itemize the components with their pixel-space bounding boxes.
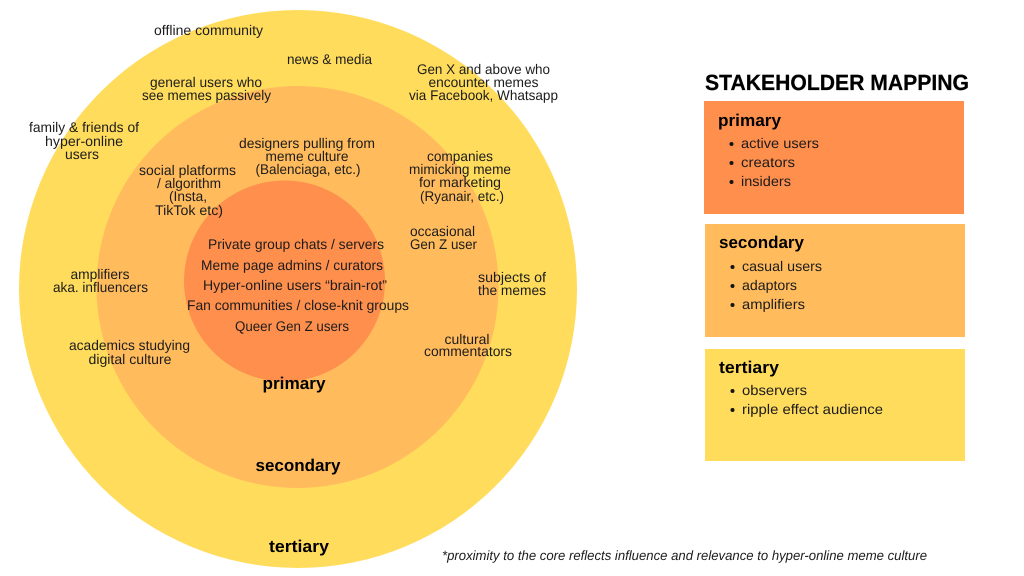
label: occasional Gen Z user: Gen Z user [410,236,477,252]
label: subjects of the memes: the memes [478,282,546,298]
label: general users: general users who [150,74,262,90]
label: academics: digital culture [88,351,172,367]
label: social platforms: (Insta, [169,188,207,204]
label: occasional Gen Z user [410,223,477,252]
secondary label: secondary [256,456,341,475]
label: cultural commentators: cultural [444,331,490,347]
label: offline community: offline community [154,22,263,38]
panel: secondary [705,224,965,337]
tertiary label: tertiary [269,537,330,556]
panel: tertiary: observers [742,382,807,398]
label: amplifiers: amplifiers [70,266,130,282]
label: general users: see memes passively [142,87,271,103]
label: family and friends: family & friends of [29,119,139,135]
panel: secondary: casual users [742,258,822,274]
label: social platforms [139,162,236,218]
label: designers: meme culture [266,148,349,164]
label: cultural commentators: commentators [424,343,512,359]
label: amplifiers: aka. influencers [53,279,148,295]
label: Gen X and above: encounter memes [428,74,538,90]
primary stakeholders list: Fan communities / close-knit groups [187,297,409,313]
panel: primary [704,101,964,214]
label: companies: (Ryanair, etc.) [420,188,504,204]
label: companies: for marketing [419,174,501,190]
primary stakeholders list: Hyper-online users “brain-rot” [203,277,387,293]
primary stakeholders list: Queer Gen Z users [235,318,349,334]
panel: primary: active users [741,135,819,151]
label: general users [142,74,271,103]
middle circle: secondary [96,86,498,488]
label: social platforms: / algorithm [157,175,221,191]
label: designers [239,135,375,177]
label: Gen X and above: Gen X and above who [417,61,550,77]
label: Gen X and above [409,61,558,103]
label: occasional Gen Z user: occasional [410,223,475,239]
panel: secondary: amplifiers [742,296,805,312]
label: Gen X and above: via Facebook, Whatsapp [409,87,558,103]
label: designers: (Balenciaga, etc.) [256,161,360,177]
primary stakeholders list: Private group chats / servers [208,236,384,252]
label: designers: designers pulling from [239,135,375,151]
label: social platforms: social platforms [139,162,236,178]
label: subjects of the memes: subjects of [478,269,546,285]
panel: secondary: secondary [719,233,805,252]
label: academics [69,337,190,367]
label: news and media: news & media [287,51,372,67]
label: academics: academics studying [69,337,190,353]
label: companies: mimicking meme [409,161,511,177]
label: social platforms: TikTok etc) [155,202,223,218]
title: STAKEHOLDER MAPPING [705,70,969,95]
panel: secondary: adaptors [742,277,797,293]
primary stakeholders list [187,236,409,334]
primary label: primary [262,374,326,393]
panel: tertiary: tertiary [719,358,780,377]
footnote: *proximity to the core reflects influence and relevance to hyper-online meme culture [442,548,927,563]
panel: tertiary [705,349,965,461]
panel: primary: creators [741,154,795,170]
label: cultural commentators [424,331,512,359]
label: companies [409,148,511,204]
label: family and friends: hyper-online [45,133,123,149]
panel: primary: primary [718,111,782,130]
inner circle: primary [184,180,385,393]
panel: primary: insiders [741,173,791,189]
label: companies: companies [427,148,493,164]
primary stakeholders list: Meme page admins / curators [201,257,383,273]
label: family and friends: users [65,146,99,162]
panel: tertiary: ripple effect audience [742,401,883,417]
label: family and friends [29,119,139,162]
label: subjects of the memes [478,269,546,298]
label: amplifiers [53,266,148,295]
